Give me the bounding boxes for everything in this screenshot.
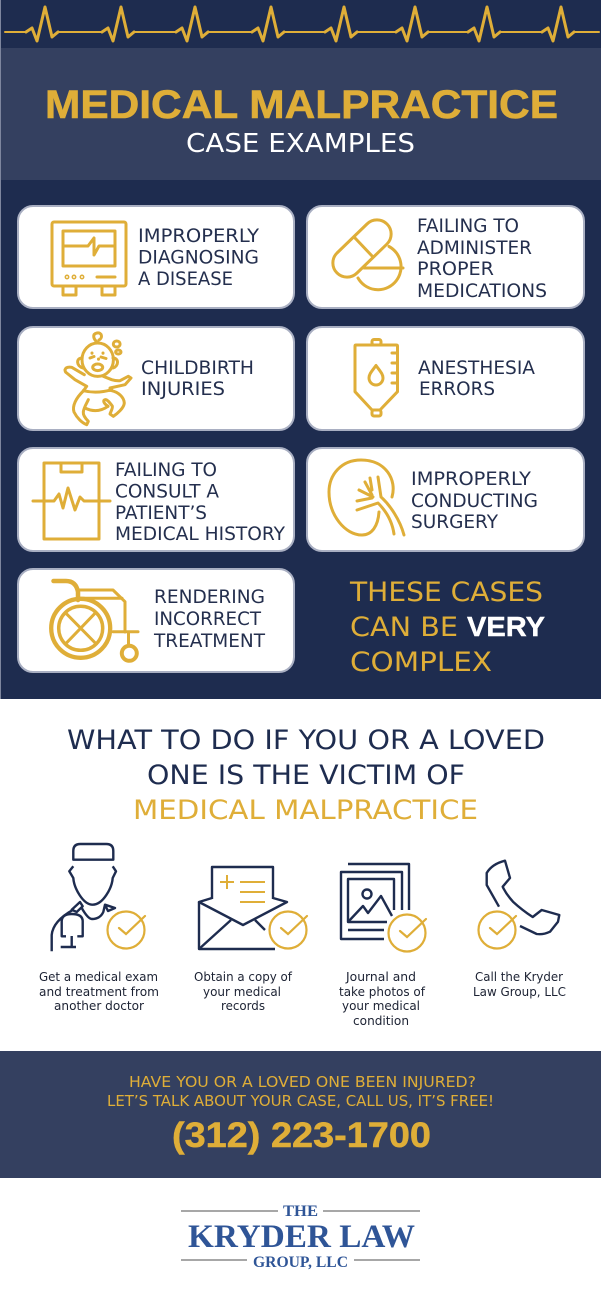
caption: records	[221, 999, 265, 1013]
caption	[473, 970, 566, 999]
card text: MEDICAL HISTORY	[115, 523, 285, 545]
card text: MEDICATIONS	[417, 280, 547, 302]
icon: check badge	[388, 914, 426, 952]
card text: INCORRECT	[154, 608, 261, 630]
card: rendering incorrect treatment	[18, 569, 294, 672]
card text: CONSULT A	[115, 480, 219, 502]
call to action text: LET’S TALK ABOUT YOUR CASE, CALL US, IT’S FREE!	[107, 1092, 494, 1110]
icon: photos	[341, 864, 409, 939]
caption	[339, 970, 426, 1028]
step: journal and photos	[339, 864, 426, 1028]
callout: these cases can be very complex: COMPLEX	[350, 647, 492, 678]
caption: Call the Kryder	[475, 970, 563, 984]
card text	[418, 357, 535, 400]
icon: pills	[333, 220, 403, 290]
step: medical records	[194, 867, 307, 1013]
icon: check badge	[478, 912, 516, 948]
icon: crying baby	[65, 333, 131, 425]
card text	[153, 586, 265, 652]
icon: patient monitor	[52, 222, 126, 295]
call to action text	[107, 1073, 494, 1110]
step: medical exam	[39, 844, 159, 1013]
heading: what to do: ONE IS THE VICTIM OF	[147, 760, 465, 791]
card: anesthesia errors	[307, 327, 584, 430]
call to action text: HAVE YOU OR A LOVED ONE BEEN INJURED?	[129, 1073, 476, 1091]
card text: ERRORS	[419, 378, 495, 400]
card text: DIAGNOSING	[138, 246, 259, 268]
logo: The Kryder Law Group: GROUP, LLC	[253, 1254, 348, 1271]
icon: clipboard with pulse	[33, 463, 110, 539]
caption: Law Group, LLC	[473, 985, 566, 999]
header band	[1, 48, 601, 180]
step: call the firm	[473, 861, 566, 999]
caption	[194, 970, 293, 1013]
icon: kidney	[329, 460, 404, 535]
panel: top navy section	[0, 0, 601, 699]
icon: check badge	[270, 912, 307, 948]
subtitle: CASE EXAMPLES	[186, 129, 415, 159]
card text: IMPROPERLY	[138, 225, 259, 247]
icon: doctor	[52, 844, 116, 951]
phone number: (312) 223-1700	[172, 1116, 431, 1155]
card text: ADMINISTER	[417, 237, 532, 259]
card text: SURGERY	[411, 511, 498, 533]
card text: FAILING TO	[115, 459, 217, 481]
caption: take photos of	[339, 985, 426, 999]
caption	[39, 970, 159, 1013]
logo: The Kryder Law Group: KRYDER LAW	[188, 1219, 415, 1255]
heartbeat line	[5, 7, 599, 41]
caption: your medical	[203, 985, 281, 999]
icon: IV bag	[355, 340, 398, 416]
icon: letter lines	[220, 875, 265, 902]
caption: condition	[353, 1014, 409, 1028]
title: MEDICAL MALPRACTICE	[45, 83, 558, 127]
card: improperly conducting surgery	[307, 448, 584, 551]
card text: INJURIES	[141, 378, 225, 400]
callout: these cases can be very complex: VERY	[467, 611, 545, 642]
card text: FAILING TO	[417, 215, 519, 237]
card text	[115, 459, 285, 545]
callout: these cases can be very complex	[349, 577, 545, 678]
caption: Obtain a copy of	[194, 970, 293, 984]
callout: these cases can be very complex: CAN BE	[350, 612, 458, 643]
card text	[417, 215, 547, 302]
heading: what to do	[67, 725, 545, 826]
caption: and treatment from	[39, 985, 159, 999]
caption: your medical	[342, 999, 420, 1013]
icon: check badge	[108, 912, 145, 948]
card text: PATIENT’S	[115, 502, 207, 524]
icon: wheelchair	[51, 581, 138, 661]
card text	[411, 468, 538, 533]
card text: RENDERING	[154, 586, 265, 608]
heading: what to do: MEDICAL MALPRACTICE	[133, 795, 478, 826]
card text: PROPER	[417, 258, 494, 280]
card text: ANESTHESIA	[418, 357, 535, 379]
logo: The Kryder Law Group: THE	[283, 1203, 318, 1220]
card: childbirth injuries	[18, 327, 294, 430]
caption: another doctor	[54, 999, 144, 1013]
card: failing to consult	[18, 448, 294, 551]
card: failing to administer	[307, 206, 584, 308]
icon: envelope with letter	[199, 867, 287, 949]
card text: A DISEASE	[138, 268, 233, 290]
logo: The Kryder Law Group	[181, 1203, 420, 1271]
callout: these cases can be very complex: THESE CASES	[349, 577, 543, 608]
panel: call to action	[0, 1051, 601, 1178]
heading: what to do: WHAT TO DO IF YOU OR A LOVED	[67, 725, 545, 756]
card text: CHILDBIRTH	[141, 357, 254, 379]
card text	[138, 225, 259, 290]
caption: Journal and	[345, 970, 416, 984]
card: improperly diagnosing	[18, 206, 294, 308]
card text: CONDUCTING	[411, 490, 538, 512]
card text	[141, 357, 254, 400]
card text: TREATMENT	[153, 630, 265, 652]
card text: IMPROPERLY	[411, 468, 531, 490]
caption: Get a medical exam	[39, 970, 158, 984]
icon: phone handset	[487, 861, 559, 934]
